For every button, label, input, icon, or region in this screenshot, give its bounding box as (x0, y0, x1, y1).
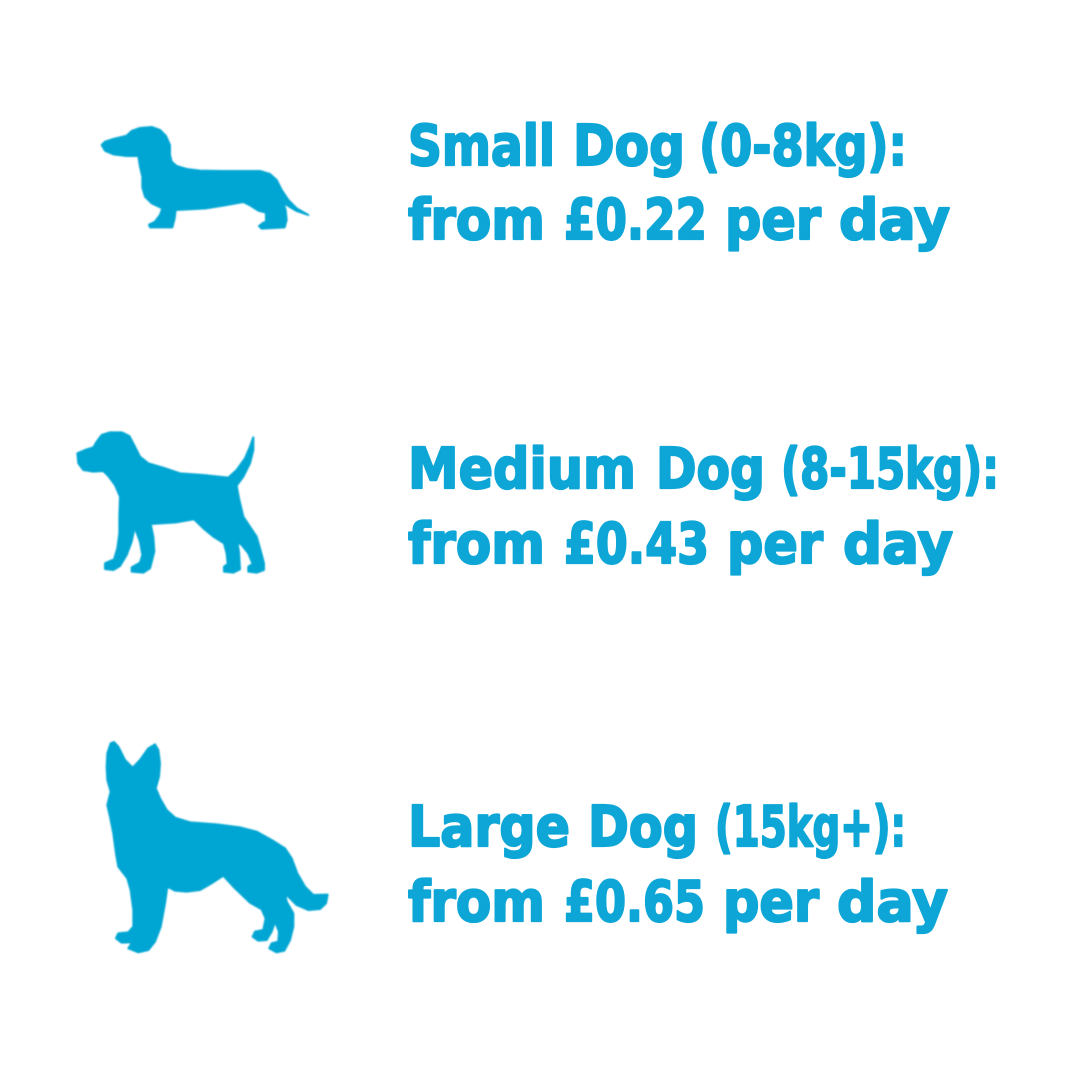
icon: medium dog (beagle) (77, 432, 264, 573)
medium dog heading: Dog (656, 437, 765, 502)
large dog price line: day (837, 870, 948, 935)
small dog heading (408, 114, 907, 179)
medium dog price line: from (408, 512, 545, 577)
large dog price line: £0.65 (564, 870, 705, 935)
small dog price line (408, 188, 950, 253)
text: large dog price (408, 795, 948, 935)
small dog heading: Dog (573, 114, 685, 179)
medium dog heading: Medium (408, 437, 636, 502)
large dog price line: from (408, 870, 545, 935)
small dog heading: (0-8kg): (699, 114, 907, 179)
medium dog price line (408, 512, 953, 577)
medium dog price line: per (727, 512, 823, 577)
small dog price line: day (839, 188, 950, 253)
large dog heading: Large (408, 795, 570, 860)
large dog heading: Dog (588, 795, 698, 860)
small dog price line: from (408, 188, 545, 253)
icon: small dog (dachshund) (102, 127, 308, 229)
text: small dog price (408, 114, 950, 253)
large dog price line: per (723, 870, 819, 935)
small dog heading: Small (408, 114, 555, 179)
large dog heading: (15kg+): (715, 795, 906, 860)
large dog heading (408, 795, 906, 860)
medium dog heading (408, 437, 999, 502)
small dog price line: £0.22 (564, 188, 707, 253)
icon: large dog (shepherd) (107, 742, 328, 952)
large dog price line (408, 870, 948, 935)
medium dog heading: (8-15kg): (781, 437, 999, 502)
text: medium dog price (408, 437, 999, 577)
medium dog price line: £0.43 (564, 512, 709, 577)
small dog price line: per (725, 188, 821, 253)
medium dog price line: day (843, 512, 953, 577)
